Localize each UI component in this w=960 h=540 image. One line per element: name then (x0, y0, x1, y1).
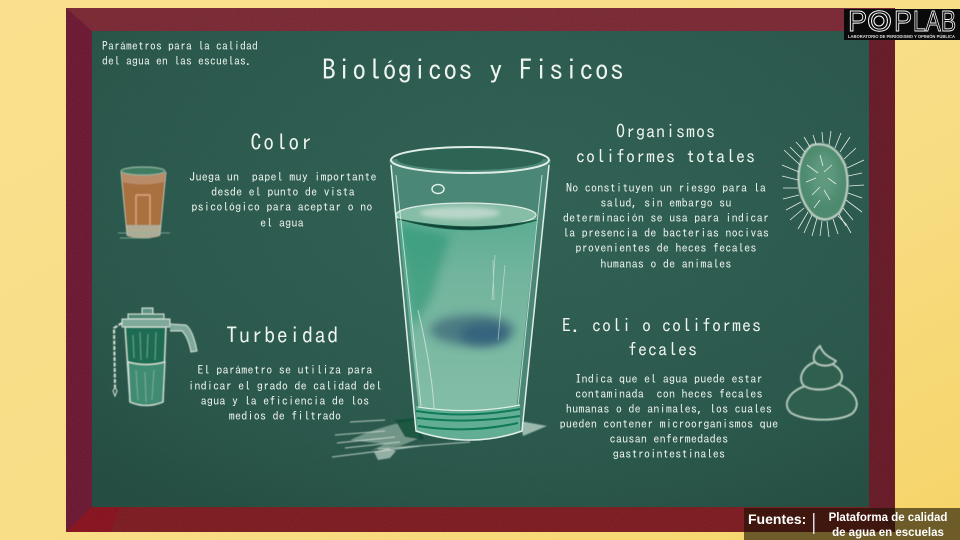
icon: bacterium (782, 131, 864, 237)
logo: POP LAB: P (894, 6, 912, 38)
panel: color (118, 131, 377, 238)
text: coliformes description: la presencia de bacterias nocivas (563, 227, 769, 239)
text: coliformes description: No constituyen un riesgo para la (566, 182, 766, 194)
heading: E. coli o coliformes fecales: E. coli o coliformes (562, 317, 762, 335)
glass outline (391, 147, 549, 440)
text: color description: Juega un papel muy importante (189, 171, 377, 183)
note: scope of parameters (102, 41, 258, 67)
text: E. coli description: humanas o de animales, los cuales (566, 403, 772, 415)
heading: organismos coliformes totales: coliformes totales (576, 148, 756, 166)
glass base (416, 406, 520, 439)
logo: POP LAB: O (867, 6, 892, 38)
panel: organismos coliformes totales (563, 123, 864, 270)
text: coliformes description: salud, sin embargo su (600, 197, 732, 209)
label: fuentes: Fuentes: (748, 511, 806, 527)
heading: color: Color (250, 131, 314, 153)
text: turbeidad description: agua y la eficiencia de los (201, 395, 369, 407)
title: Biológicos y Fisicos (322, 56, 625, 84)
text: color description: desde el punto de vista (211, 186, 355, 198)
text: E. coli description: pueden contener microorganismos que (560, 418, 778, 430)
text: E. coli description: contaminada con heces fecales (575, 388, 763, 400)
icon: water jug (113, 308, 197, 406)
glass upper opening (397, 148, 543, 170)
source name (829, 512, 947, 539)
text: coliformes description: provenientes de heces fecales (575, 242, 757, 254)
text: turbeidad description: medios de filtrado (229, 410, 341, 422)
panel: E. coli (560, 317, 857, 460)
text: coliformes description: determinación se usa para indicar (563, 212, 769, 224)
text: coliformes description (563, 182, 769, 270)
panel: chalkboard surface (92, 31, 869, 507)
text: color description: el agua (260, 217, 304, 229)
source name: de agua en escuelas (832, 527, 944, 539)
text: E. coli description: Indica que el agua puede estar (575, 373, 763, 385)
icon: glass of brown water (118, 167, 170, 238)
text: coliformes description: humanas o de animales (600, 258, 732, 270)
panel: turbeidad (113, 308, 382, 422)
illustration: glass of water (332, 147, 560, 460)
text: E. coli description: causan enfermedades (610, 433, 728, 445)
chalk smear below glass (332, 418, 547, 460)
heading: E. coli o coliformes fecales (562, 317, 762, 359)
icon: poop (787, 346, 857, 420)
text: turbeidad description (188, 364, 382, 422)
heading: E. coli o coliformes fecales: fecales (628, 341, 698, 359)
text: color description: psicológico para aceptar o no (191, 201, 373, 213)
footer: sources (744, 508, 960, 540)
water (398, 218, 537, 410)
logo: POP LAB (844, 6, 960, 40)
heading: organismos coliformes totales (576, 123, 756, 166)
water surface (396, 203, 536, 227)
note: scope of parameters: Parámetros para la calidad (102, 41, 258, 52)
heading: organismos coliformes totales: Organismos (616, 123, 716, 141)
text: E. coli description: gastrointestinales (613, 448, 725, 460)
heading: turbeidad: Turbeidad (226, 324, 340, 346)
text: E. coli description (560, 373, 778, 460)
logo: POP LAB: P (848, 6, 867, 38)
source name: Plataforma de calidad (829, 512, 947, 524)
text: color description (189, 171, 377, 229)
note: scope of parameters: del agua en las escuelas. (102, 56, 252, 67)
text: turbeidad description: El parámetro se utiliza para (198, 364, 372, 376)
text: turbeidad description: indicar el grado de calidad del (188, 380, 382, 392)
glass body (389, 153, 551, 441)
